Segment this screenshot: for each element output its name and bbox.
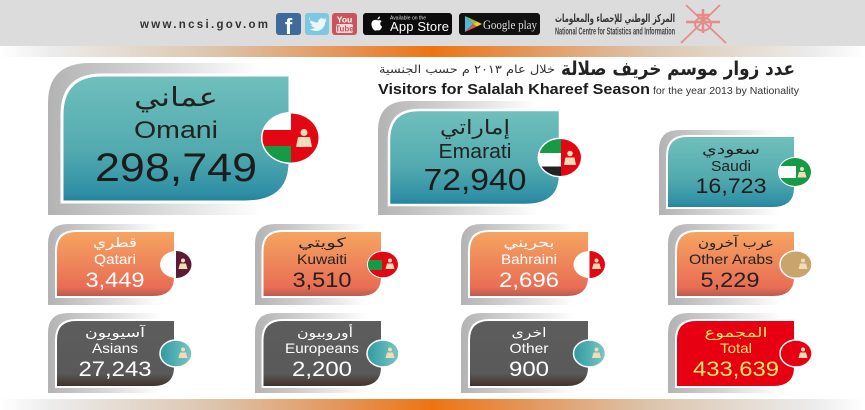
- panel: Emarati: [378, 101, 583, 215]
- panel: Other Arabs: 5,229: [700, 269, 760, 292]
- panel: Other Arabs: [668, 224, 812, 305]
- panel: Total: 433,639: [693, 358, 779, 381]
- panel: Saudi: [659, 130, 812, 215]
- panel: Qatari: [48, 224, 192, 305]
- arabic title: [379, 58, 795, 80]
- icon: Saudi flag: [778, 157, 812, 187]
- badge: app store: App Store: [390, 19, 449, 34]
- panel: Europeans: Europeans: [285, 340, 359, 356]
- panel: Bahraini: Bahraini: [501, 251, 557, 267]
- badge: google play: [459, 13, 540, 35]
- panel: Omani: 298,749: [95, 146, 257, 190]
- top gradient strip: [0, 46, 865, 57]
- logo text: [555, 12, 675, 38]
- icon: Asians marker: [160, 340, 192, 367]
- panel: Omani: عماني: [134, 83, 218, 113]
- icon: youtube: You: [337, 14, 352, 24]
- panel: Kuwaiti: Kuwaiti: [297, 251, 347, 267]
- panel: Asians: آسيويون: [85, 324, 147, 341]
- panel: Total: Total: [720, 340, 752, 356]
- panel: Asians: 27,243: [78, 358, 152, 381]
- panel: Bahraini: [461, 224, 606, 305]
- icon: Other marker: [574, 340, 606, 367]
- panel: Asians: [48, 313, 192, 393]
- icon: UAE flag: [538, 138, 583, 178]
- panel: Emarati: 72,940: [424, 162, 526, 197]
- badge: app store: Available on the: [390, 16, 426, 22]
- arabic title: خلال عام ٢٠١٣ م حسب الجنسية: [379, 62, 555, 76]
- panel: Omani: Omani: [134, 117, 218, 144]
- english title: [378, 81, 799, 98]
- icon: facebook: [276, 13, 301, 39]
- panel: Other: [461, 313, 606, 393]
- panel: Europeans: [255, 313, 399, 393]
- icon: twitter: [305, 13, 329, 35]
- panel: Bahraini: بحريني: [504, 236, 554, 251]
- website address: www.ncsi.gov.om: [139, 19, 268, 31]
- panel: Kuwaiti: كويتي: [298, 236, 347, 251]
- panel: Saudi: 16,723: [696, 175, 766, 198]
- panel: Total: [668, 313, 812, 393]
- icon: Total marker: [780, 340, 812, 367]
- panel: Kuwaiti: [255, 224, 399, 305]
- panel: Europeans: أوروبيون: [297, 324, 353, 341]
- icon: Oman flag: [261, 112, 320, 164]
- english title: for the year 2013 by Nationality: [653, 86, 799, 97]
- panel: Emarati: Emarati: [438, 141, 512, 163]
- icon: facebook: f: [285, 14, 293, 39]
- panel: Other Arabs: Other Arabs: [689, 251, 773, 267]
- panel: Other Arabs: عرب آخرون: [698, 234, 774, 251]
- panel: Qatari: قطري: [93, 236, 137, 251]
- panel: Emarati: إماراتي: [440, 115, 510, 140]
- panel: Kuwaiti: 3,510: [292, 269, 352, 292]
- icon: Other Arabs marker: [780, 251, 812, 278]
- panel: Omani: [48, 63, 320, 215]
- header bar: [0, 0, 865, 46]
- panel: Other: Other: [510, 340, 549, 356]
- badge: app store: [363, 13, 452, 35]
- panel: Other: اخرى: [512, 326, 546, 341]
- panel: Asians: Asians: [92, 340, 138, 356]
- panel: Other: 900: [509, 358, 549, 381]
- arabic title: عدد زوار موسم خريف صلالة: [561, 58, 795, 80]
- logo text: National Centre for Statistics and Information: [555, 26, 675, 38]
- panel: Saudi: Saudi: [711, 159, 751, 175]
- icon: Kuwait flag: [367, 250, 399, 280]
- bottom gradient strip: [0, 399, 865, 410]
- panel: Total: المجموع: [704, 326, 768, 341]
- panel: Saudi: سعودي: [702, 142, 760, 158]
- icon: Europeans marker: [367, 340, 399, 367]
- badge: google play: Google play: [483, 17, 537, 32]
- title block: [378, 58, 799, 98]
- icon: national emblem: [681, 5, 726, 43]
- icon: Bahrain flag: [574, 251, 606, 278]
- icon: youtube: [332, 13, 357, 35]
- panel: Bahraini: 2,696: [499, 269, 559, 292]
- icon: youtube: Tube: [335, 24, 354, 34]
- panel: Europeans: 2,200: [292, 358, 352, 381]
- english title: Visitors for Salalah Khareef Season: [378, 81, 650, 98]
- panel: Qatari: Qatari: [94, 251, 136, 267]
- logo text: المركز الوطني للإحصاء والمعلومات: [555, 12, 675, 25]
- icon: Qatar flag: [160, 251, 192, 278]
- panel: Qatari: 3,449: [86, 269, 144, 292]
